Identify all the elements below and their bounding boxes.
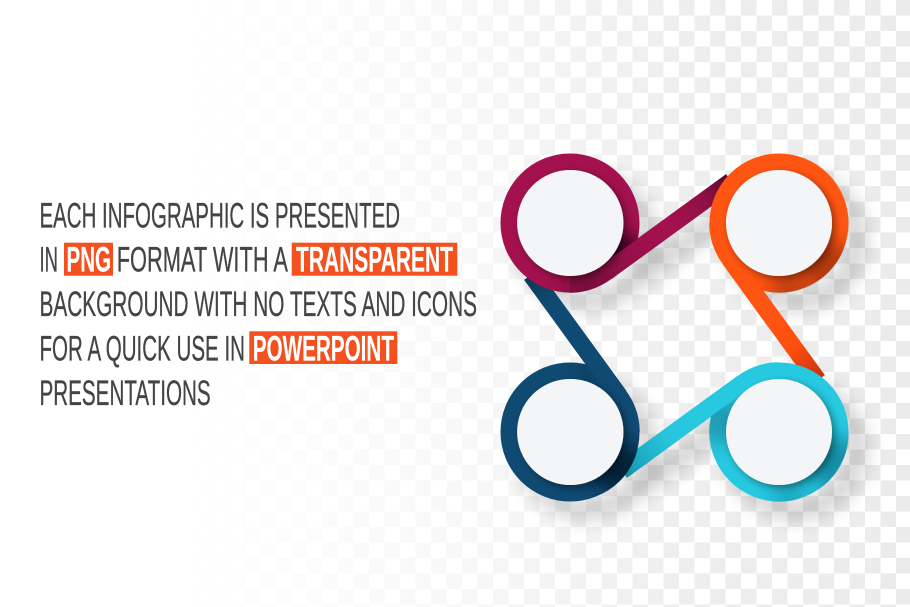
- line 1: EACH INFOGRAPHIC IS PRESENTED: [40, 196, 400, 235]
- line 2: IN: [40, 241, 58, 280]
- highlight: POWERPOINT: POWERPOINT: [253, 330, 394, 369]
- ribbons running between the rings: [531, 181, 818, 471]
- line 3: BACKGROUND WITH NO TEXTS AND ICONS: [40, 285, 477, 324]
- white disc: bottom left: [518, 379, 624, 485]
- ribbon: navy link: [531, 275, 619, 396]
- highlight: PNG: PNG: [66, 241, 111, 280]
- ribbon: cyan link: [622, 383, 743, 471]
- ring: cyan: [685, 362, 849, 502]
- highlight: POWERPOINT: [249, 330, 397, 369]
- ring: orange: [718, 162, 856, 322]
- highlight: TRANSPARENT: [292, 241, 457, 280]
- ribbon: maroon link: [606, 181, 731, 272]
- soft cast shadows of the diagram: [526, 179, 857, 510]
- line 2: FORMAT WITH A: [117, 241, 288, 280]
- highlight: TRANSPARENT: TRANSPARENT: [296, 241, 453, 280]
- text block: description: [40, 196, 477, 413]
- ring: navy: [509, 335, 648, 496]
- line 5: PRESENTATIONS: [40, 374, 211, 413]
- ribbon: orange link: [730, 259, 818, 380]
- highlight: PNG: [64, 241, 113, 280]
- white disc: bottom right: [726, 379, 832, 485]
- ring: maroon: [509, 162, 660, 306]
- line 2: [40, 241, 457, 280]
- line 4: FOR A QUICK USE IN: [40, 330, 245, 369]
- white disc: top right: [726, 170, 832, 276]
- white disc: top left: [518, 170, 624, 276]
